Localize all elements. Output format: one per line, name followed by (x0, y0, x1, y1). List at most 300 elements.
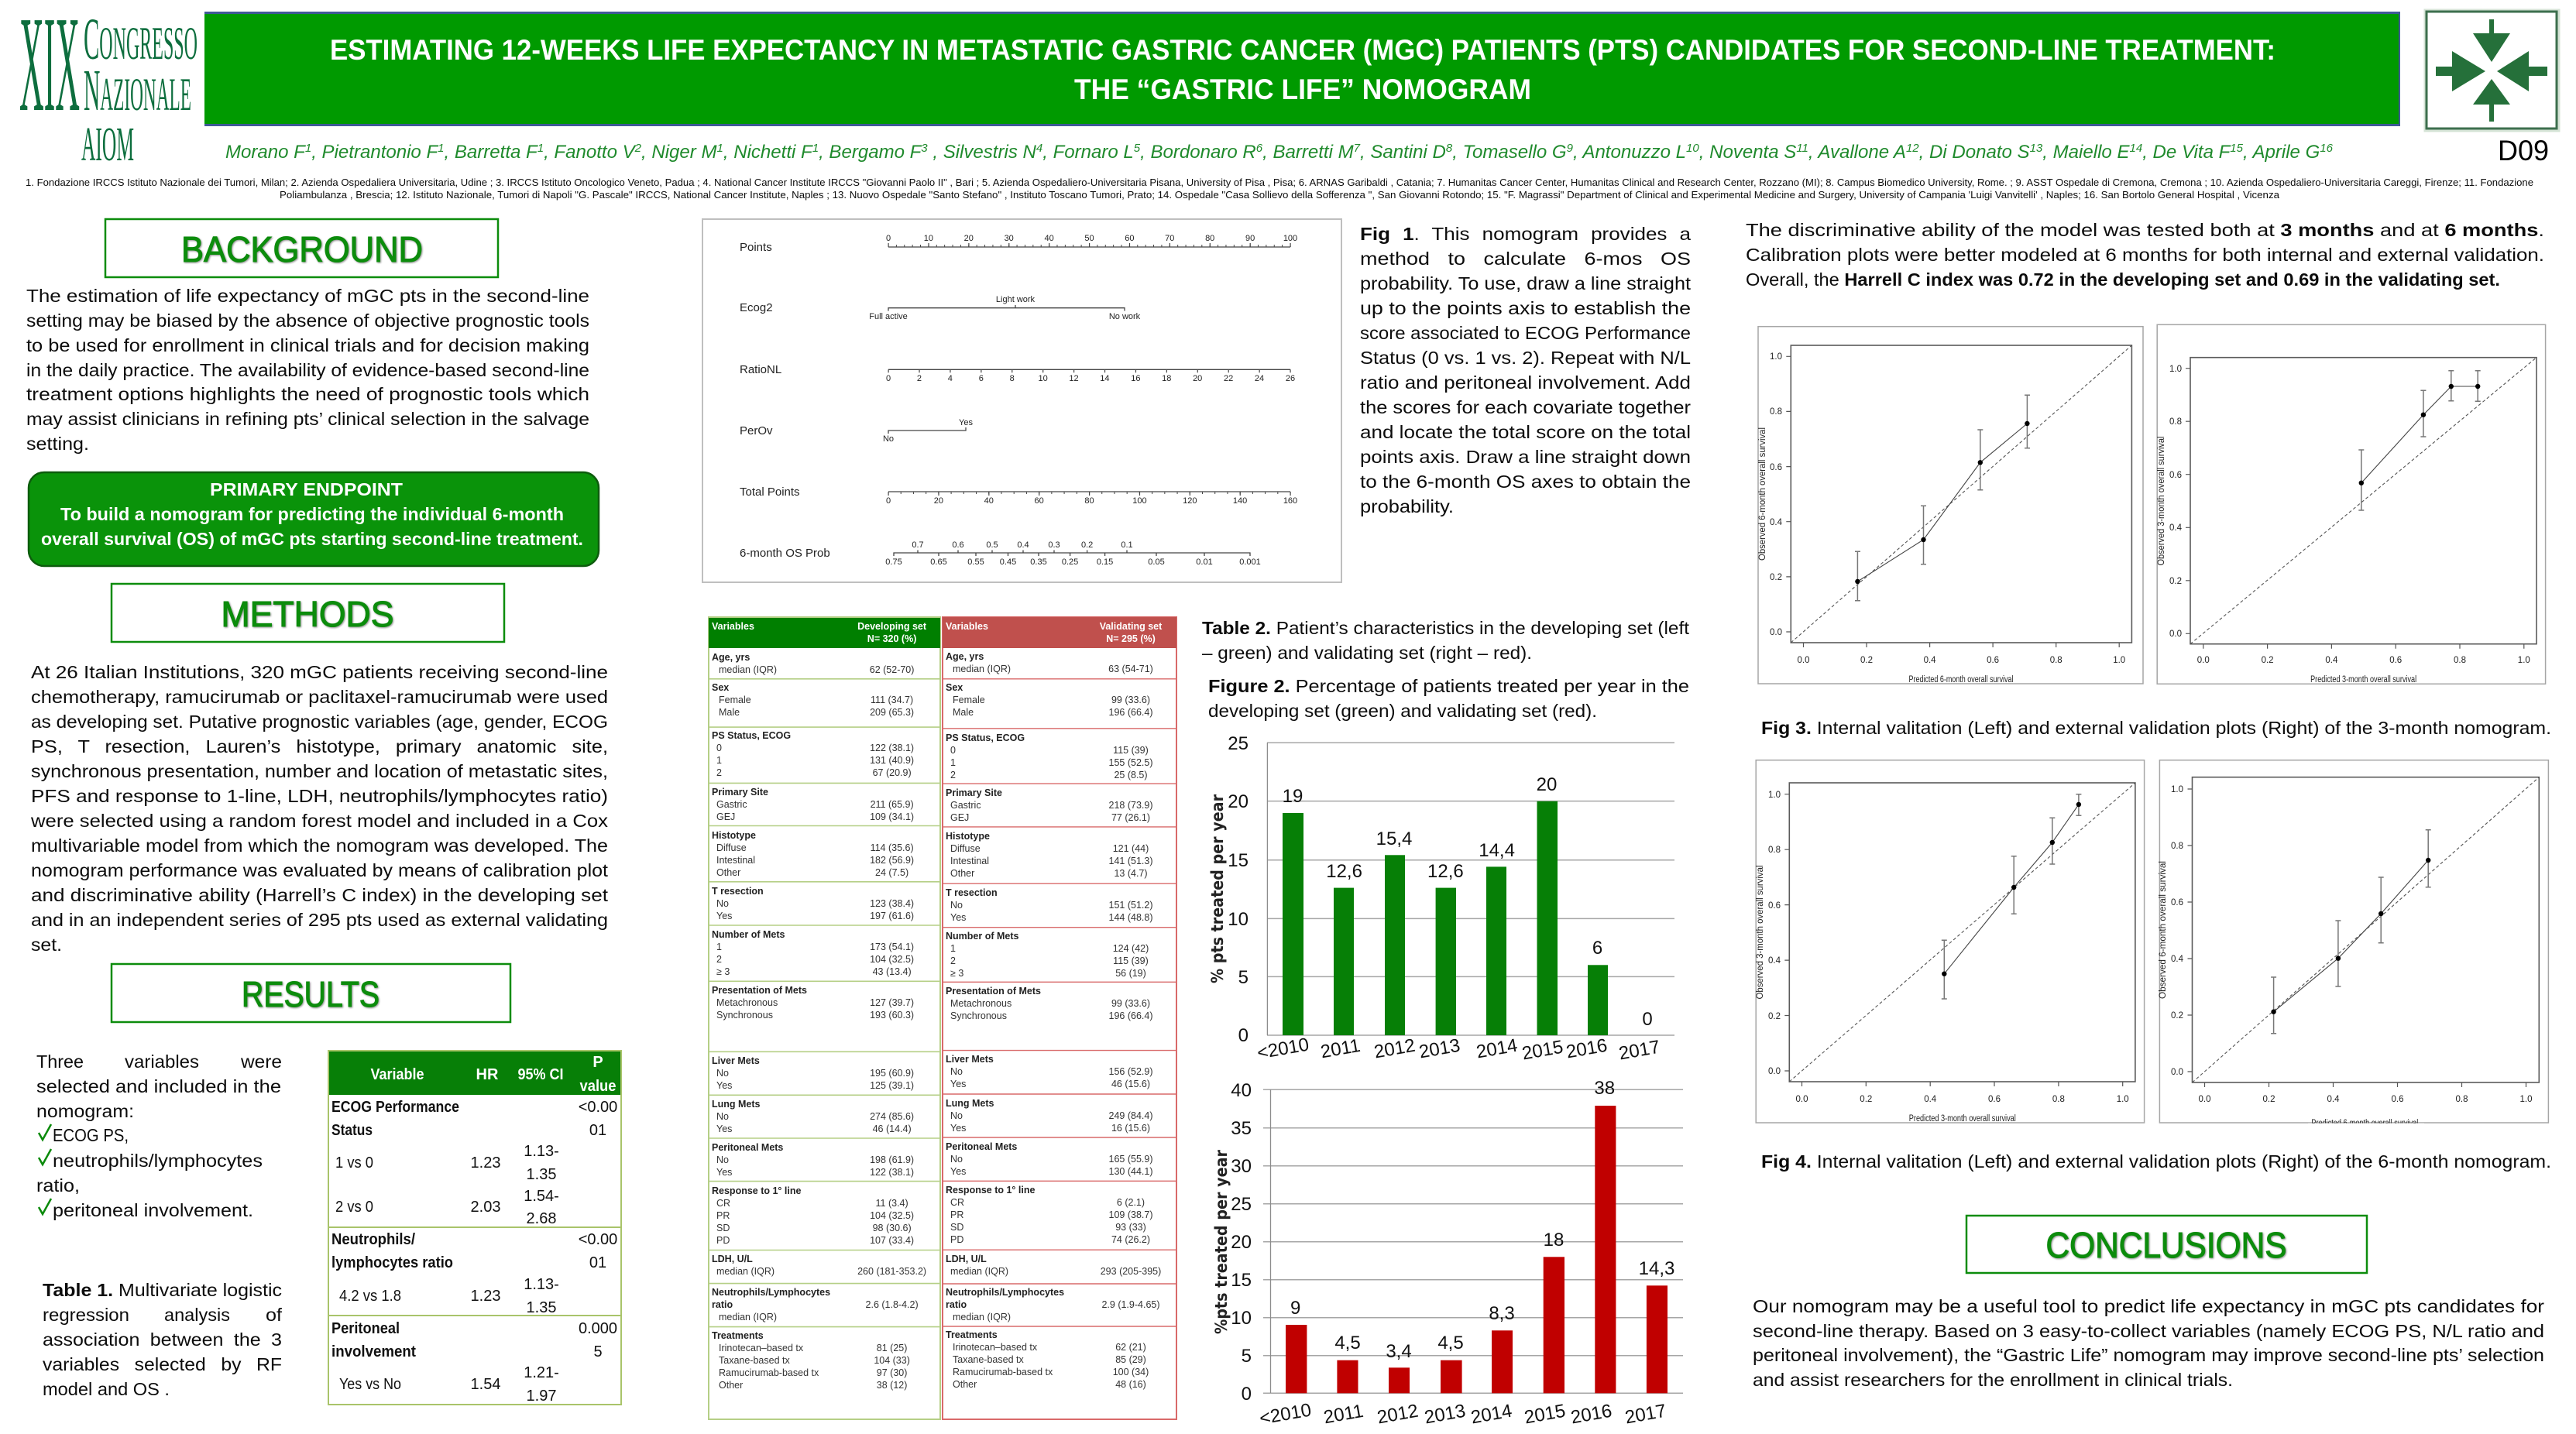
right rows: age to primary site: median (IQR) (953, 664, 1011, 674)
authors: , Silvestris N (928, 142, 1037, 163)
left rows: age to primary site: Male (719, 707, 740, 718)
value labels: 19 (1283, 786, 1303, 807)
year labels: 2013 (1417, 1035, 1461, 1063)
calibration plot: 6-month external: Predicted 6-month overall survival (2311, 1119, 2418, 1128)
authors: , Barretta F (445, 142, 538, 163)
table 1 row: NLR: 1.13- (524, 1276, 559, 1293)
table 1 row: ECOG: 1.13- (524, 1143, 559, 1160)
calibration plot: 6-month internal: 0.4 (1768, 956, 1781, 966)
text: background: treatment options highlights the need of prognostic tools which (26, 384, 589, 404)
table 2 right header: Variables (946, 621, 988, 632)
heading: methods: METHODS (222, 594, 393, 634)
authors: 15 (2230, 142, 2244, 155)
right rows: response to treatments: 74 (26.2) (1111, 1234, 1150, 1245)
poster code D09: D09 (2498, 135, 2549, 166)
authors: , Niger M (641, 142, 717, 163)
right rows: histotype to presentation: T resection (946, 887, 998, 898)
figure 1: nomogram (702, 219, 1341, 582)
calibration plot: 3-month external: 0.4 (2169, 523, 2183, 533)
table 1 row: NLR: 1.23 (471, 1288, 500, 1305)
title text (330, 34, 2275, 105)
nomogram axis: points: 50 (1084, 234, 1094, 243)
text: discriminative ability (1746, 220, 2544, 290)
nomogram axis: 6-month OS probability: 0.35 (1030, 557, 1047, 567)
text: background: in the daily practice. The availability of evidence-based second-line (26, 360, 589, 380)
calibration plot: 6-month internal: 1.0 (1768, 791, 1781, 800)
title text: THE “GASTRIC LIFE” NOMOGRAM (1074, 74, 1531, 105)
text: conclusions: and assist researchers for the enrollment in clinical trials. (1753, 1370, 2233, 1390)
title text: ESTIMATING 12-WEEKS LIFE EXPECTANCY IN METASTATIC GASTRIC CANCER (MGC) PATIENTS (PTS) CANDIDATES FOR SECOND-LINE TREATMENT: (330, 34, 2275, 66)
right rows: response to treatments: Irinotecan–based tx (953, 1342, 1038, 1353)
right rows: response to treatments: Taxane-based tx (953, 1354, 1024, 1365)
text: selected variables: Three (36, 1051, 84, 1072)
bar chart: developing set (1208, 733, 1674, 1065)
left rows: metastatic sites: No (716, 1154, 729, 1165)
year labels: <2010 (1258, 1399, 1313, 1429)
nomogram axis: RatioNL: 22 (1224, 374, 1233, 383)
table 1 header: HR (476, 1066, 499, 1083)
calibration plot: 6-month internal: 0.6 (1768, 901, 1781, 911)
right rows: metastatic sites: 16 (15.6) (1111, 1123, 1150, 1134)
right rows: age to primary site: 196 (66.4) (1109, 707, 1152, 718)
value labels (1283, 774, 1653, 1030)
text: conclusions (1753, 1296, 2544, 1390)
right rows: metastatic sites (946, 1054, 1152, 1177)
y axis labels: 20 (1228, 791, 1249, 812)
nomogram axis: total points: 120 (1183, 496, 1197, 506)
caption: table 1: variables selected by RF (43, 1354, 282, 1374)
left rows: age to primary site: median (IQR) (719, 664, 777, 675)
right rows: histotype to presentation: 1 (950, 943, 956, 954)
left rows: histotype to presentation (712, 830, 914, 1021)
calibration plot: 3-month internal: Predicted 6-month overall survival (1908, 675, 2014, 684)
right rows: histotype to presentation: Intestinal (950, 856, 989, 866)
table 1 row: NLR: 4.2 vs 1.8 (339, 1288, 401, 1305)
year labels: 2014 (1469, 1401, 1513, 1429)
left rows: metastatic sites: Peritoneal Mets (712, 1142, 783, 1153)
nomogram axis: Ecog2: Ecog2 (740, 301, 773, 314)
left rows: metastatic sites: 46 (14.4) (873, 1124, 912, 1134)
nomogram axis: RatioNL: 4 (948, 374, 953, 383)
right rows: age to primary site (946, 651, 1153, 823)
right rows: age to primary site: Female (953, 695, 985, 705)
right rows: histotype to presentation: Yes (950, 912, 966, 923)
nomogram axis: 6-month OS probability: 0.15 (1097, 557, 1113, 567)
nomogram axis: 6-month OS probability: 0.3 (1048, 540, 1060, 550)
caption: table 1 (43, 1280, 282, 1399)
caption: figure 1: points axis. Draw a line straight down (1360, 447, 1691, 467)
left rows: response to treatments: CR (716, 1198, 730, 1209)
caption: figure 1: the scores for each covariate together (1360, 397, 1691, 417)
authors: , Pietrantonio F (311, 142, 439, 163)
nomogram axis: total points: 40 (984, 496, 994, 506)
left rows: response to treatments: Other (719, 1380, 743, 1391)
calibration plot: 3-month external: 0.2 (2262, 656, 2274, 665)
text: methods: and in an independent series of 295 pts used as external validating (31, 910, 608, 930)
y axis labels: 35 (1231, 1118, 1252, 1139)
year labels: 2016 (1569, 1401, 1613, 1429)
right rows: response to treatments: 2.9 (1.9-4.65) (1101, 1299, 1160, 1310)
right rows: age to primary site: 218 (73.9) (1109, 800, 1152, 811)
y axis labels: 20 (1231, 1232, 1252, 1253)
nomogram axis: 6-month OS probability: 0.001 (1239, 557, 1261, 567)
left rows: metastatic sites: Liver Mets (712, 1055, 760, 1066)
right rows: metastatic sites: 249 (84.4) (1109, 1110, 1152, 1121)
nomogram axis: 6-month OS probability: 0.05 (1148, 557, 1165, 567)
calibration plot: 3-month external: 1.0 (2518, 656, 2530, 665)
caption: figure 1: Fig 1 . This nomogram provides a (1360, 224, 1692, 244)
calibration plot: 6-month internal: 1.0 (2117, 1095, 2129, 1104)
caption: table 1: of (266, 1305, 282, 1325)
right rows: response to treatments: 93 (33) (1115, 1222, 1146, 1233)
right rows: response to treatments: Ramucirumab-based tx (953, 1367, 1053, 1377)
table 1 row: peritoneal: 0.000 (579, 1320, 617, 1337)
y axis labels (1231, 1080, 1252, 1405)
y axis labels: 40 (1231, 1080, 1252, 1101)
left rows: histotype to presentation: 123 (38.4) (870, 898, 914, 909)
nomogram axis: RatioNL: RatioNL (740, 363, 781, 376)
nomogram axis: RatioNL: 6 (979, 374, 984, 383)
right rows: histotype to presentation: 115 (39) (1113, 955, 1149, 966)
nomogram axis: total points: 80 (1084, 496, 1094, 506)
right rows: age to primary site: 0 (950, 745, 956, 756)
nomogram axis: 6-month OS probability (740, 540, 1261, 567)
caption: figure 1: Status (0 vs. 1 vs. 2). Repeat with N/L (1360, 348, 1691, 368)
text: background: may assist clinicians in refining pts’ clinical selection in the salvage (26, 409, 589, 429)
authors: 8 (1446, 142, 1453, 155)
y axis labels (1228, 733, 1249, 1046)
left rows: response to treatments: 38 (12) (877, 1380, 907, 1391)
text: background: to be used for enrollment in clinical trials and for decision making (26, 335, 589, 355)
right rows: age to primary site: PS Status, ECOG (946, 732, 1025, 743)
calibration plot: 6-month external: 0.2 (2171, 1011, 2183, 1021)
text: selected variables: were (240, 1051, 282, 1072)
text: background (26, 286, 589, 454)
year labels: 2012 (1372, 1035, 1417, 1063)
left rows: response to treatments: ratio (712, 1299, 733, 1310)
right rows: metastatic sites: No (950, 1154, 963, 1165)
right rows: metastatic sites: Yes (950, 1123, 966, 1134)
year labels: 2015 (1520, 1037, 1564, 1065)
left rows: age to primary site: 109 (34.1) (870, 811, 914, 822)
text: methods (30, 662, 609, 955)
year labels: 2011 (1319, 1035, 1362, 1062)
left rows: age to primary site: 2 (716, 767, 722, 778)
left rows: age to primary site: 111 (34.7) (871, 695, 913, 705)
caption: table 1: Table 1. Multivariate logistic (43, 1280, 282, 1300)
calibration plot: 6-month internal: 0.8 (1768, 846, 1781, 855)
left rows: metastatic sites: 195 (60.9) (870, 1068, 914, 1079)
nomogram axis: 6-month OS probability: 0.6 (952, 540, 964, 550)
authors: 5 (1134, 142, 1141, 155)
caption: table 2: Table 2. Patient’s characteristics in the developing set (left (1202, 618, 1689, 638)
y axis labels: 0 (1242, 1384, 1252, 1405)
calibration plot: 3-month external: Predicted 3-month overall survival (2310, 675, 2416, 684)
nomogram axis: 6-month OS probability: 0.65 (930, 557, 947, 567)
right rows: metastatic sites: 156 (52.9) (1109, 1066, 1152, 1077)
authors: , Bergamo F (819, 142, 922, 163)
calibration plot: 3-month internal: 0.4 (1770, 518, 1783, 527)
table 2 left: developing set (709, 617, 940, 1419)
left rows: response to treatments: 104 (32.5) (870, 1210, 914, 1221)
text: selected variables: nomogram: (36, 1101, 134, 1121)
right rows: metastatic sites: No (950, 1110, 963, 1121)
callout: primary endpoint: To build a nomogram for predicting the individual 6-month (60, 504, 564, 524)
nomogram axis: 6-month OS probability: 6-month OS Prob (740, 547, 830, 560)
authors: , Aprile G (2243, 142, 2320, 163)
y axis labels: 10 (1231, 1308, 1252, 1329)
authors: 1 (538, 142, 544, 155)
year labels: 2013 (1423, 1401, 1467, 1429)
text: CONGRESSO (84, 7, 197, 72)
right rows: age to primary site: GEJ (950, 812, 969, 823)
text: selected variables: peritoneal involvement. (53, 1200, 253, 1220)
right rows: histotype to presentation: 124 (42) (1113, 943, 1149, 954)
left rows: response to treatments: 97 (30) (877, 1367, 907, 1378)
right rows: response to treatments: median (IQR) (953, 1312, 1011, 1323)
caption: figure 1: probability. To use, draw a line straight (1360, 273, 1691, 293)
caption: figure 1: probability. (1360, 496, 1454, 516)
text: selected variables: ECOG PS, (53, 1125, 129, 1145)
nomogram axis: points (740, 234, 1297, 254)
nomogram axis: PerOv: No (883, 434, 894, 444)
value labels: 15,4 (1376, 828, 1412, 849)
right rows: response to treatments: CR (950, 1197, 964, 1208)
value labels: 12,6 (1326, 861, 1362, 882)
y axis labels: 30 (1231, 1156, 1252, 1177)
y axis labels: 5 (1242, 1346, 1252, 1367)
caption: figure 1: score associated to ECOG Performance (1360, 323, 1691, 343)
calibration plot: 6-month external: 0.6 (2171, 898, 2183, 907)
title banner (204, 12, 2400, 126)
nomogram axis: 6-month OS probability: 0.1 (1121, 540, 1133, 550)
left rows: age to primary site: Primary Site (712, 787, 768, 798)
left rows: response to treatments: 260 (181-353.2) (857, 1266, 926, 1277)
value labels: 4,5 (1437, 1333, 1464, 1353)
text: methods: as developing set. Putative prognostic variables (age, gender, ECOG (31, 712, 608, 732)
nomogram axis: points: 100 (1283, 234, 1297, 243)
nomogram axis: total points (740, 485, 1297, 506)
calibration plot: 6-month internal: 0.2 (1860, 1095, 1872, 1104)
nomogram axis: points: Points (740, 241, 772, 254)
calibration plot: 3-month internal: 0.0 (1797, 656, 1809, 665)
right rows: histotype to presentation: 196 (66.4) (1109, 1010, 1152, 1021)
nomogram axis: points: 0 (886, 234, 891, 243)
nomogram axis: RatioNL: 18 (1162, 374, 1171, 383)
table 1: multivariate analysis (328, 1051, 621, 1405)
nomogram axis: total points: 60 (1034, 496, 1044, 506)
left rows: age to primary site: 209 (65.3) (870, 707, 914, 718)
left rows: age to primary site: 0 (716, 743, 722, 753)
text: methods: At 26 Italian Institutions, 320 mGC patients receiving second-line (31, 662, 608, 682)
nomogram axis: points: 10 (924, 234, 933, 243)
nomogram axis: points: 90 (1245, 234, 1255, 243)
text: methods: synchronous presentation, number and location of metastatic sites, (31, 761, 608, 781)
table 1 row: ECOG: 2.68 (527, 1210, 556, 1227)
right rows: response to treatments: 293 (205-395) (1101, 1266, 1161, 1277)
calibration plot: 3-month internal: 0.8 (2050, 656, 2063, 665)
text: methods: nomogram performance was evaluated by means of calibration plot (31, 860, 608, 880)
left rows: response to treatments: LDH, U/L (712, 1254, 753, 1264)
left rows: age to primary site: 122 (38.1) (870, 743, 914, 753)
nomogram axis: total points: 20 (934, 496, 943, 506)
right rows: metastatic sites: Peritoneal Mets (946, 1141, 1017, 1152)
right rows: response to treatments: Neutrophils/Lymphocytes (946, 1287, 1064, 1298)
red bars (1286, 1106, 1668, 1393)
text: methods: were selected using a random forest model and included in a Cox (30, 811, 608, 831)
value labels: 8,3 (1489, 1303, 1515, 1324)
authors: 13 (2030, 142, 2043, 155)
left rows: metastatic sites: No (716, 1111, 729, 1122)
affiliations: Poliambulanza , Brescia; 12. Istituto Nazionale, Tumori di Napoli "G. Pascale" IRCCS, National Cancer Institute, Naples ; 13. Nuovo Ospedale "Santo Stefano" , Instituto Toscano Tumori, Prato; 14. Ospedale "Casa Sollievo della Sofferenza ", San Giovanni Rotondo; 15. "F. Magrassi" Department of Clinical and Experimental Medicine and Surgery, University of Campania 'Luigi Vanvitelli' , Naples; 16. San Bortolo General Hospital , Vicenza (280, 189, 2280, 201)
table 1 row: ECOG: 1.35 (527, 1166, 556, 1183)
table 1 row: NLR: lymphocytes ratio (331, 1254, 453, 1271)
authors: , Di Donato S (1919, 142, 2030, 163)
table 2 left header: Developing set (857, 621, 927, 632)
left rows: response to treatments: median (IQR) (716, 1266, 775, 1277)
value labels: 3,4 (1386, 1341, 1412, 1362)
authors: 14 (2130, 142, 2142, 155)
authors: 6 (1256, 142, 1263, 155)
calibration plot: 3-month external: 0.8 (2454, 656, 2466, 665)
authors: 1 (438, 142, 445, 155)
year labels (1255, 1034, 1661, 1065)
right rows: age to primary site: 25 (8.5) (1114, 770, 1148, 780)
text: methods: and discriminative ability (Harrell’s C index) in the developing set (31, 885, 609, 905)
right rows: histotype to presentation: 121 (44) (1113, 843, 1149, 854)
right rows: histotype to presentation: 99 (33.6) (1111, 998, 1150, 1009)
right rows: metastatic sites: Lung Mets (946, 1098, 994, 1109)
left rows: histotype to presentation: Other (716, 867, 740, 878)
text: methods: PS, T resection, Lauren’s histotype, primary anatomic site, (31, 736, 608, 756)
text: conclusions: second-line therapy. Based on 3 easy-to-collect variables (namely ECOG PS, N/L ratio and (1753, 1321, 2544, 1341)
text: discriminative ability: Calibration plots were better modeled at 6 months for both internal and external validation. (1746, 245, 2544, 265)
bar chart: validating set (1212, 1078, 1683, 1429)
text: methods: PFS and response to 1-line, LDH, neutrophils/lymphocytes ratio) (31, 786, 608, 806)
table 1 row: peritoneal: 5 (593, 1343, 603, 1360)
nomogram axis: 6-month OS probability: 0.4 (1017, 540, 1029, 550)
left rows: histotype to presentation: 193 (60.3) (870, 1010, 914, 1021)
right rows: histotype to presentation: ≥ 3 (950, 968, 963, 979)
authors: 11 (1796, 142, 1808, 155)
left rows: histotype to presentation: Histotype (712, 830, 756, 841)
nomogram axis: 6-month OS probability: 0.25 (1062, 557, 1078, 567)
text: methods: multivariable model from which the nomogram was developed. The (31, 835, 608, 856)
right rows: histotype to presentation: 56 (19) (1115, 968, 1146, 979)
authors: , Tomasello G (1452, 142, 1567, 163)
left rows: histotype to presentation: ≥ 3 (716, 966, 730, 977)
left rows: metastatic sites: Yes (716, 1124, 732, 1134)
calibration plot: 6-month external: 0.0 (2198, 1095, 2210, 1104)
authors: , Fanotto V (544, 142, 637, 163)
left rows: metastatic sites: 122 (38.1) (870, 1167, 914, 1178)
caption: figure 1 (1360, 224, 1692, 516)
left rows: response to treatments: 107 (33.4) (870, 1235, 914, 1246)
left rows: histotype to presentation: 197 (61.6) (870, 911, 914, 921)
value labels: 38 (1594, 1078, 1615, 1099)
y axis title: % pts treated per year (1208, 794, 1227, 983)
caption: figure 1: method to calculate 6-mos OS (1360, 249, 1691, 269)
authors: 4 (1036, 142, 1042, 155)
calibration plot: 6-month internal: 0.0 (1768, 1067, 1781, 1076)
right rows: metastatic sites: Yes (950, 1079, 966, 1089)
left rows: histotype to presentation: Synchronous (716, 1010, 773, 1021)
nomogram axis: total points: 140 (1233, 496, 1247, 506)
right rows: age to primary site: 77 (26.1) (1111, 812, 1150, 823)
table 2 left header: Variables (712, 621, 754, 632)
calibration plot: 3-month internal: 0.4 (1924, 656, 1936, 665)
right rows: age to primary site: 155 (52.5) (1109, 757, 1152, 768)
nomogram axis: 6-month OS probability: 0.75 (885, 557, 902, 567)
right rows: metastatic sites: Liver Mets (946, 1054, 994, 1065)
left rows: histotype to presentation: Metachronous (716, 997, 778, 1008)
right rows: metastatic sites: No (950, 1066, 963, 1077)
left rows: metastatic sites (712, 1055, 914, 1178)
nomogram axis: 6-month OS probability: 0.01 (1196, 557, 1213, 567)
nomogram axis: RatioNL (740, 363, 1295, 383)
calibration plot: 3-month external: 0.4 (2325, 656, 2338, 665)
callout: primary endpoint: PRIMARY ENDPOINT (210, 479, 403, 499)
value labels: 20 (1537, 774, 1557, 795)
calibration plot: 3-month external: Observed 3-month overall survival (2157, 437, 2166, 565)
right rows: histotype to presentation: 141 (51.3) (1109, 856, 1152, 866)
value labels: 0 (1642, 1009, 1653, 1030)
table 2 left header (709, 618, 940, 648)
calibration plot: 6-month internal: Predicted 3-month overall survival (1909, 1114, 2016, 1124)
calibration plot: 3-month external: 0.0 (2169, 630, 2182, 639)
nomogram axis: total points: 160 (1283, 496, 1297, 506)
authors: 12 (1906, 142, 1919, 155)
table 1 row: NLR: 01 (589, 1254, 606, 1271)
left rows: metastatic sites: Yes (716, 1080, 732, 1091)
right rows: response to treatments (946, 1185, 1161, 1390)
table 1 row: peritoneal: Peritoneal (331, 1320, 400, 1337)
right rows: response to treatments: median (IQR) (950, 1266, 1008, 1277)
left rows: metastatic sites: 274 (85.6) (870, 1111, 914, 1122)
left rows: age to primary site: Female (719, 695, 751, 705)
calibration plot: 3-month internal: 0.6 (1770, 463, 1782, 472)
nomogram axis: total points: Total Points (740, 485, 800, 499)
caption: figure 1: to the 6-month OS axes to obtain the (1360, 472, 1691, 492)
left rows: response to treatments: Taxane-based tx (719, 1355, 790, 1366)
authors: 9 (1567, 142, 1574, 155)
table 1 row: peritoneal: 1.97 (527, 1388, 556, 1405)
nomogram axis: total points: 0 (886, 496, 891, 506)
calibration plot: 3-month external: 1.0 (2169, 365, 2182, 374)
left rows: histotype to presentation: No (716, 898, 729, 909)
table 2 right header: N= 295 (%) (1106, 633, 1156, 644)
callout: primary endpoint: overall survival (OS) of mGC pts starting second-line treatment. (41, 529, 583, 549)
left rows: age to primary site: Sex (712, 682, 729, 693)
calibration plot: 3-month external: 0.2 (2169, 577, 2182, 586)
calibration plot: 6-month internal: 0.8 (2052, 1095, 2065, 1104)
text: conclusions: peritoneal involvement), the “Gastric Life” nomogram may improve second-line pts’ selection (1753, 1345, 2544, 1365)
caption: figure 1: up to the points axis to establish the (1360, 298, 1691, 318)
y axis labels: 25 (1231, 1194, 1252, 1215)
text: selected variables (36, 1051, 282, 1220)
calibration plot: 3-month external: 0.8 (2169, 417, 2182, 427)
right rows: response to treatments: 48 (16) (1115, 1379, 1146, 1390)
caption: table 2: – green) and validating set (right – red). (1202, 643, 1532, 663)
nomogram axis: Ecog2: Full active (869, 312, 908, 321)
table 1 row: ECOG: <0.00 (579, 1099, 617, 1116)
left rows: metastatic sites: 198 (61.9) (870, 1154, 914, 1165)
left rows: metastatic sites: Lung Mets (712, 1099, 761, 1110)
calibration plot: 6-month external (2159, 760, 2548, 1130)
left rows: response to treatments: PR (716, 1210, 730, 1221)
green bars (1283, 801, 1608, 1035)
value labels: 9 (1290, 1298, 1300, 1319)
